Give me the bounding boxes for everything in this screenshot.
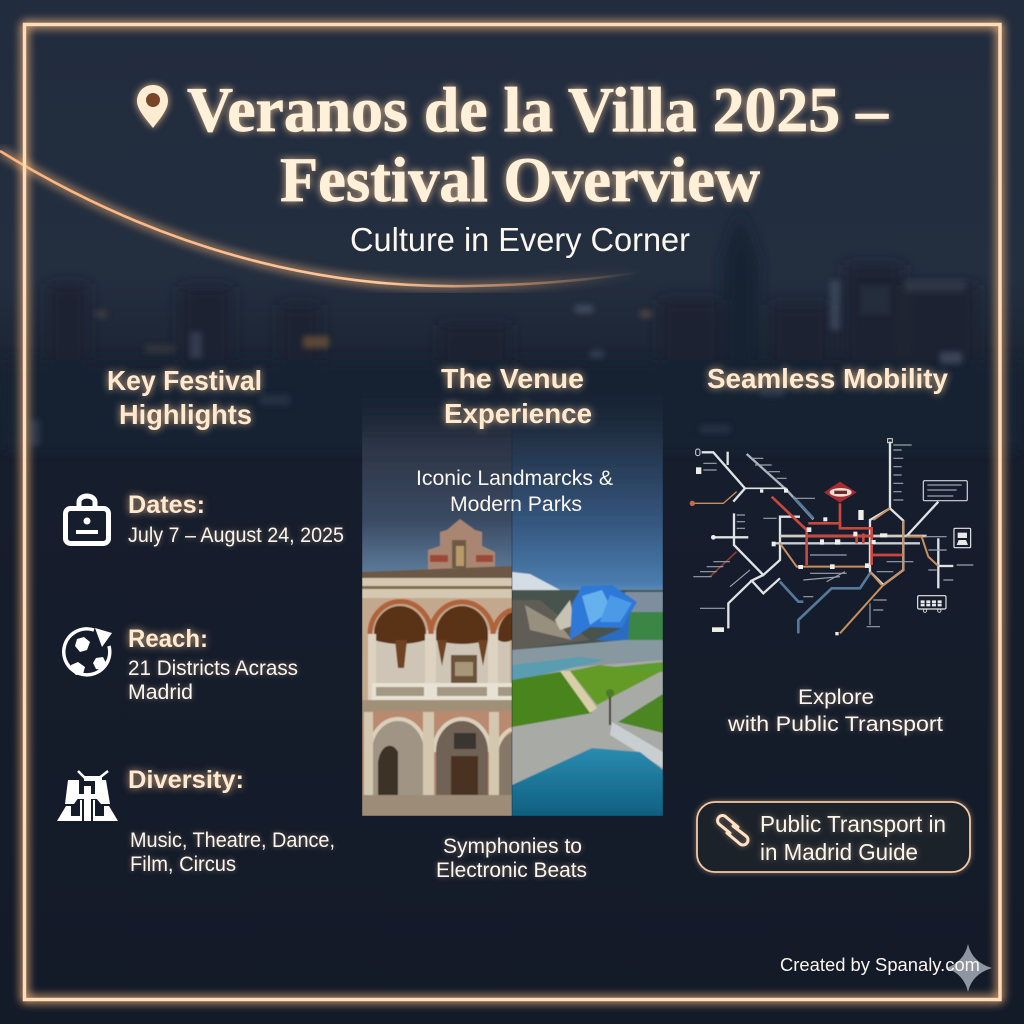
text: reach: 21 Districts Acrass: [128, 657, 298, 680]
text: reach: Madrid: [128, 681, 193, 704]
text: iconic landmarks: [416, 467, 613, 516]
panel: seamless mobility: [690, 363, 973, 872]
button: public transport guide: [697, 802, 970, 872]
text: iconic landmarks: Iconic Landmarcks &: [416, 467, 613, 490]
text: dates: [128, 491, 344, 547]
text: dates: July 7 – August 24, 2025: [128, 524, 344, 547]
heading: the venue experience: Experience: [444, 398, 592, 429]
button label: Public Transport in: [760, 811, 946, 837]
text: symphonies to electronic beats: Electronic Beats: [436, 859, 587, 882]
credit: created by Spanaly.com: [780, 944, 992, 992]
text: iconic landmarks: Modern Parks: [450, 493, 582, 516]
heading: key festival highlights: [107, 365, 262, 430]
text: diversity: [128, 766, 335, 876]
text: explore with public transport: with Public Transport: [727, 713, 943, 736]
text: reach: Reach:: [128, 625, 208, 653]
heading: the venue experience: The Venue: [441, 363, 584, 394]
text: dates: Dates:: [128, 491, 205, 519]
subtitle: Culture in Every Corner: [350, 221, 690, 258]
heading: the venue experience: [441, 363, 592, 429]
text: diversity: Diversity:: [128, 766, 244, 794]
icon: globe: [64, 628, 112, 675]
icon: performing arts stage: [57, 771, 118, 821]
text: explore with public transport: [727, 686, 943, 736]
text: symphonies to electronic beats: [436, 835, 587, 882]
photo: historic landmark courtyard: [362, 392, 512, 816]
text: diversity: Film, Circus: [130, 853, 236, 876]
text: symphonies to electronic beats: Symphonies to: [443, 835, 582, 858]
title: [137, 75, 888, 215]
button label: [760, 811, 946, 865]
heading: key festival highlights: Highlights: [119, 399, 252, 430]
photo: modern park with blue pavilion: [512, 392, 663, 816]
icon: badge calendar: [66, 496, 108, 544]
chart: metro map: [690, 439, 973, 635]
text: explore with public transport: Explore: [798, 686, 874, 709]
credit: created by Spanaly.com: Created by Spanaly.com: [780, 955, 980, 975]
title: Veranos de la Villa 2025 –: [187, 75, 888, 145]
text: diversity: Music, Theatre, Dance,: [130, 829, 335, 852]
icon: sparkle: [946, 944, 992, 992]
panel: the venue experience: [362, 363, 663, 882]
icon: location pin: [137, 85, 168, 128]
text: reach: [128, 625, 298, 704]
heading: key festival highlights: Key Festival: [107, 365, 262, 396]
panel: key festival highlights: [57, 365, 344, 876]
button label: in Madrid Guide: [760, 839, 918, 865]
decorative glowing curve: [0, 151, 640, 286]
title: Festival Overview: [280, 145, 760, 215]
heading: seamless mobility: Seamless Mobility: [707, 363, 948, 394]
icon: chain link: [718, 816, 748, 845]
